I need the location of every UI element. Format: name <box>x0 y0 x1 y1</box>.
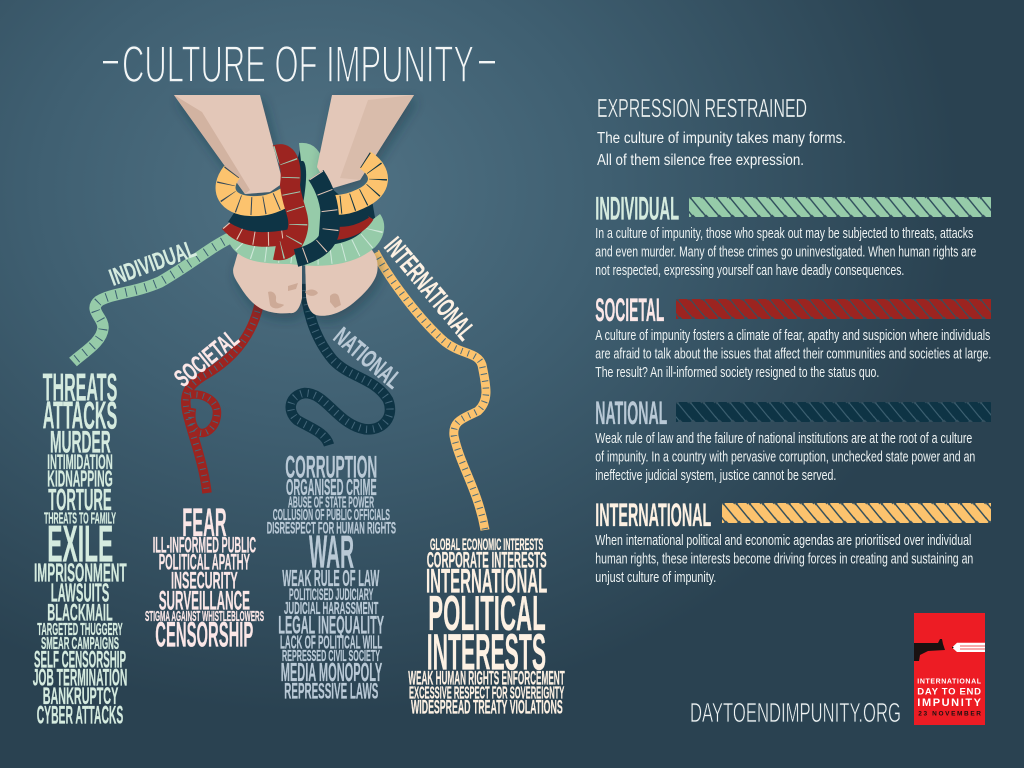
word cloud: societal: INSECURITY <box>171 567 238 594</box>
text: WIDESPREAD TREATY VIOLATIONS <box>411 697 563 718</box>
word cloud: national: JUDICIAL HARASSMENT <box>284 598 378 618</box>
label: societal: SOCIETAL <box>169 324 244 393</box>
navy and red coils <box>230 213 368 236</box>
word cloud: international: CORPORATE INTERESTS <box>427 547 547 572</box>
word cloud: national: WAR <box>309 526 354 578</box>
body: international: unjust culture of impunity. <box>595 570 716 586</box>
section: societal <box>595 291 991 381</box>
word cloud: individual: MURDER <box>50 424 111 459</box>
word cloud: national: CORRUPTION <box>285 449 377 484</box>
section: individual: INDIVIDUAL <box>595 189 679 226</box>
section: national: NATIONAL <box>595 394 667 431</box>
body: individual: not respected, expressing yourself can have deadly consequences. <box>595 263 904 279</box>
intro text: The culture of impunity takes many forms. <box>597 130 846 147</box>
text: SELF CENSORSHIP <box>34 647 126 673</box>
rope bar: societal <box>676 299 991 319</box>
logo: international day to end impunity: 23 NOVEMBER <box>918 711 981 718</box>
text: THREATS <box>43 367 117 410</box>
text: CENSORSHIP <box>155 615 253 655</box>
word cloud: individual: TORTURE <box>48 483 112 517</box>
rope bar: individual <box>689 197 991 217</box>
text: CYBER ATTACKS <box>37 701 123 729</box>
logo: international day to end impunity: IMPUNITY <box>917 697 982 709</box>
text: STIGMA AGAINST WHISTLEBLOWERS <box>145 609 264 625</box>
rope bar: national <box>676 402 991 422</box>
word cloud: societal: POLITICAL APATHY <box>159 549 250 574</box>
rope bar: international <box>722 503 991 523</box>
text: INTERESTS <box>427 623 546 680</box>
word cloud: societal: FEAR <box>182 500 227 545</box>
label: international: INTERNATIONAL <box>378 232 481 346</box>
rope: international <box>375 252 486 530</box>
text: MEDIA MONOPOLY <box>281 657 383 687</box>
text: COLLUSION OF PUBLIC OFFICIALS <box>273 507 390 524</box>
section: international <box>595 496 991 586</box>
icon: pencil <box>952 643 985 652</box>
word cloud: national: REPRESSED CIVIL SOCIETY <box>282 648 380 665</box>
section: individual <box>595 189 991 279</box>
label: individual: INDIVIDUAL <box>106 235 200 292</box>
body: societal <box>595 328 991 381</box>
text: SMEAR CAMPAIGNS <box>41 633 119 653</box>
text: TARGETED THUGGERY <box>37 619 123 639</box>
logo: international day to end impunity <box>914 613 985 725</box>
section: international: INTERNATIONAL <box>595 496 711 533</box>
word cloud: national <box>267 449 396 703</box>
word cloud: international: INTERNATIONAL <box>426 563 547 601</box>
red and navy knot <box>275 154 331 258</box>
text: LACK OF POLITICAL WILL <box>280 631 382 652</box>
word cloud: individual <box>33 367 127 729</box>
intro text <box>597 130 846 169</box>
title: CULTURE OF IMPUNITY <box>122 36 474 94</box>
body: individual <box>595 226 976 279</box>
text: ILL-INFORMED PUBLIC <box>153 533 256 558</box>
section: national <box>595 394 991 484</box>
word cloud: international <box>408 536 565 718</box>
word cloud: national: ORGANISED CRIME <box>286 474 377 500</box>
rope: societal <box>186 305 259 493</box>
body: national: ineffective judicial system, justice cannot be served. <box>595 468 836 484</box>
word cloud: societal <box>145 500 264 655</box>
section: societal: SOCIETAL <box>595 291 664 328</box>
body: national <box>595 431 975 484</box>
text: ATTACKS <box>43 394 117 437</box>
word cloud: individual: INTIMIDATION <box>47 450 113 474</box>
icon: gun <box>914 639 945 661</box>
hands tied with rope <box>174 95 414 316</box>
rope: national <box>291 283 390 445</box>
word cloud: individual: THREATS TO FAMILY <box>44 510 116 527</box>
text: JOB TERMINATION <box>33 665 127 692</box>
word cloud: individual: KIDNAPPING <box>47 466 113 492</box>
text: IMPRISONMENT <box>34 560 127 588</box>
body: societal: The result? An ill-informed society resigned to the status quo. <box>595 365 879 381</box>
fists <box>233 250 378 316</box>
arms <box>174 95 414 194</box>
text: EXCESSIVE RESPECT FOR SOVEREIGNTY <box>409 682 564 702</box>
text: LEGAL INEQUALITY <box>278 611 384 639</box>
word cloud: international: GLOBAL ECONOMIC INTERESTS <box>430 536 543 554</box>
green coil <box>236 152 374 256</box>
heading: expression restrained: EXPRESSION RESTRAINED <box>597 93 807 123</box>
logo: international day to end impunity: DAY TO END <box>917 686 981 698</box>
text: WEAK HUMAN RIGHTS ENFORCEMENT <box>408 667 565 689</box>
word cloud: individual: EXILE <box>47 515 113 573</box>
rope: individual <box>73 237 232 362</box>
word cloud: national: POLITICISED JUDICIARY <box>289 586 373 604</box>
word cloud: individual: LAWSUITS <box>51 580 109 608</box>
text: DISRESPECT FOR HUMAN RIGHTS <box>267 518 396 537</box>
word cloud: societal: SURVEILLANCE <box>159 585 250 615</box>
word cloud: individual: BLACKMAIL <box>47 600 113 627</box>
yellow coil <box>226 160 378 206</box>
rope bundle fill <box>240 150 378 250</box>
text: BANKRUPTCY <box>43 683 118 710</box>
logo: international day to end impunity: INTERNATIONAL <box>917 678 982 686</box>
word cloud: national: ABUSE OF STATE POWER <box>288 495 374 512</box>
text: WEAK RULE OF LAW <box>282 565 379 591</box>
intro text: All of them silence free expression. <box>597 152 804 169</box>
body: international <box>595 533 973 586</box>
word cloud: international: POLITICAL <box>428 586 546 641</box>
word cloud: national: REPRESSIVE LAWS <box>284 678 378 703</box>
label: national: NATIONAL <box>328 322 407 394</box>
